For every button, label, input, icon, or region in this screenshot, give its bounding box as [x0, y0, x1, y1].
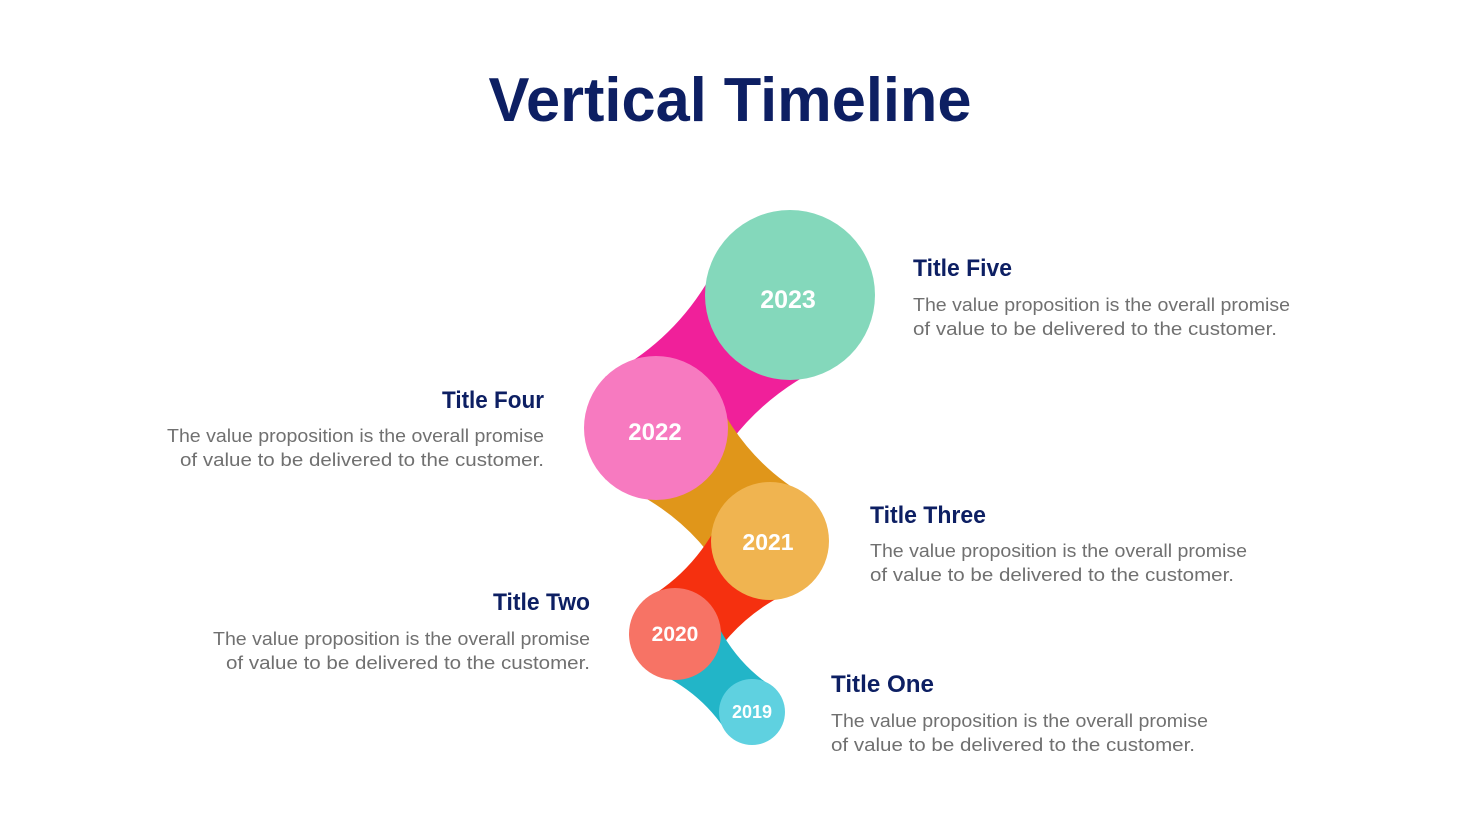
circle: 2021: [711, 482, 829, 600]
connector: 2021-2020: [643, 499, 811, 667]
circle: 2023: 2023: [760, 286, 816, 314]
text block: Title Three: of value to be delivered to the customer.: [870, 564, 1234, 585]
timeline graphic: [584, 210, 875, 745]
text block: Title Four: of value to be delivered to the customer.: [180, 449, 544, 470]
text block: Title Four: Title Four: [442, 387, 544, 414]
text block: Title One: The value proposition is the overall promise: [831, 710, 1208, 731]
title: Vertical Timeline: [488, 66, 972, 135]
text block: Title Five: The value proposition is the overall promise: [913, 294, 1290, 315]
text block: Title Three: Title Three: [870, 502, 986, 529]
circle: 2022: 2022: [628, 419, 682, 446]
text block: Title Four: [167, 387, 544, 470]
connector: 2022-2021: [605, 377, 812, 583]
circle: 2022: [584, 356, 728, 500]
circle: 2021: 2021: [742, 529, 794, 555]
text block: Title One: Title One: [831, 671, 934, 698]
text block: Title Four: The value proposition is the overall promise: [167, 425, 544, 446]
text block: Title Five: of value to be delivered to the customer.: [913, 318, 1277, 339]
text block: Title Five: Title Five: [913, 255, 1012, 282]
connector: 2023-2022: [605, 235, 850, 479]
text block: Title Two: [213, 589, 590, 673]
circle: 2019: 2019: [732, 702, 772, 722]
text block: Title Two: The value proposition is the overall promise: [213, 628, 590, 649]
text block: Title Three: The value proposition is the overall promise: [870, 540, 1247, 561]
text block: Title Two: of value to be delivered to the customer.: [226, 652, 590, 673]
circle: 2020: 2020: [652, 623, 698, 646]
text block: Title One: [831, 671, 1208, 755]
text block: Title One: of value to be delivered to the customer.: [831, 734, 1195, 755]
circle: 2023: [705, 210, 875, 380]
connector: 2020-2019: [642, 602, 776, 735]
circle: 2020: [629, 588, 721, 680]
circle: 2019: [719, 679, 785, 745]
text block: Title Three: [870, 502, 1247, 585]
text block: Title Five: [913, 255, 1290, 339]
text block: Title Two: Title Two: [493, 589, 590, 616]
